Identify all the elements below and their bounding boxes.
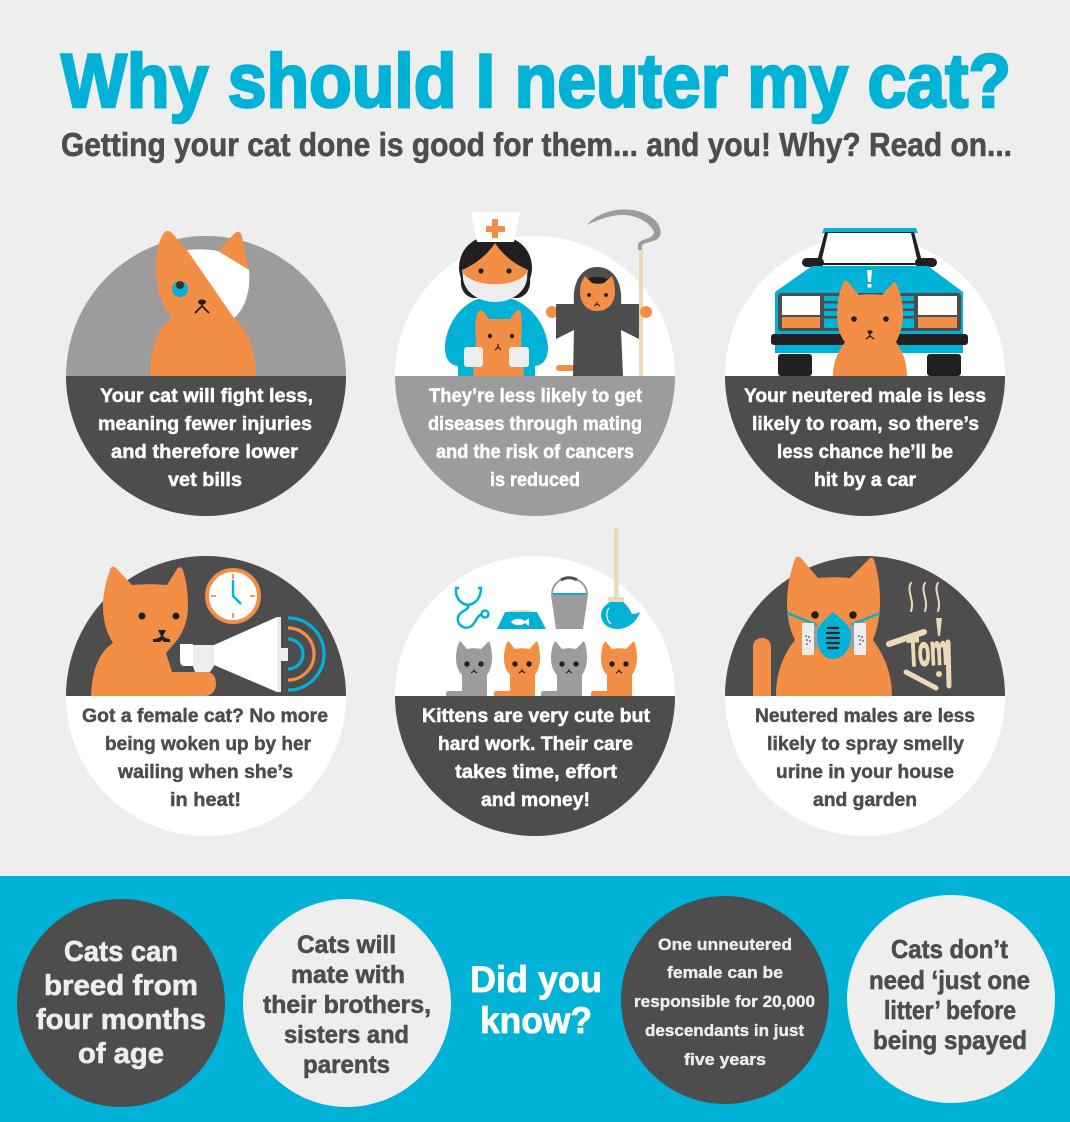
icon: kitten 4: [591, 642, 637, 696]
text: kittens: [422, 706, 651, 811]
icon: bucket: [551, 578, 588, 629]
icon: cat in gas mask: [753, 557, 892, 696]
fact: mate with family: mate with: [291, 961, 405, 989]
text: fight less: [98, 386, 313, 491]
icon: car and cat: [771, 228, 968, 376]
text: roaming: [744, 386, 986, 491]
heading: did you know: [470, 959, 602, 1041]
icon: grim reaper cat with scythe: [546, 210, 660, 376]
panel: no wailing: [66, 556, 346, 836]
fact: mate with family: [243, 899, 451, 1107]
fact: 20,000 descendants: responsible for 20,000: [634, 992, 815, 1011]
text: diseases: diseases through mating: [428, 414, 642, 435]
text: fight less: vet bills: [168, 470, 242, 491]
fact: four months: of age: [78, 1038, 164, 1070]
icon: kitten 1: [446, 642, 492, 696]
icon: kitten 3: [541, 642, 587, 696]
text: spraying: and garden: [813, 790, 917, 811]
text: spraying: urine in your house: [776, 762, 954, 783]
fact: four months: breed from: [44, 970, 198, 1002]
text: wailing: being woken up by her: [105, 734, 312, 755]
fact: mate with family: Cats will: [297, 931, 396, 959]
text: diseases: [428, 386, 643, 491]
fact: 20,000 descendants: descendants in just: [645, 1021, 804, 1040]
icon: nurse holding cat: [445, 212, 548, 376]
fact: just one litter: being spayed: [873, 1025, 1027, 1055]
text: spraying: likely to spray smelly: [767, 734, 964, 755]
fact: 20,000 descendants: One unneutered: [658, 935, 792, 954]
fact: just one litter: need ‘just one: [869, 965, 1030, 995]
icon: clock: [207, 570, 259, 622]
text: kittens: and money!: [481, 790, 590, 811]
fact: just one litter: litter’ before: [884, 995, 1016, 1025]
text: fight less: and therefore lower: [111, 442, 299, 463]
fact: just one litter: Cats don’t: [891, 934, 1008, 964]
fact: four months: four months: [36, 1004, 206, 1036]
text: fight less: meaning fewer injuries: [98, 414, 312, 435]
text: roaming: likely to roam, so there’s: [752, 414, 979, 435]
icon: kitten 2: [494, 642, 540, 696]
fact: mate with family: their brothers,: [263, 991, 431, 1019]
icon: food bowl: [497, 610, 546, 629]
heading: did you know: Did you: [470, 959, 602, 1000]
panel: kittens: [395, 528, 675, 836]
text: roaming: less chance he’ll be: [777, 442, 953, 463]
panel: fewer diseases: [395, 210, 675, 516]
icon: injured cat with bandage: [150, 231, 256, 376]
icon: stethoscope: [456, 588, 488, 628]
panel: did you know band: [0, 876, 1070, 1122]
heading: did you know: know?: [480, 1000, 592, 1041]
panel: less roaming: [725, 228, 1005, 516]
panel: fewer fights: [66, 231, 346, 516]
text: wailing: in heat!: [170, 790, 241, 811]
text: spraying: [755, 706, 975, 811]
text: roaming: hit by a car: [814, 470, 917, 491]
title: Why should I neuter my cat?: [61, 39, 1011, 124]
fact: 20,000 descendants: [621, 896, 829, 1104]
text: diseases: and the risk of cancers: [436, 442, 634, 463]
text: kittens: Kittens are very cute but: [422, 706, 651, 727]
text: wailing: [82, 706, 328, 811]
text: kittens: hard work. Their care: [438, 734, 633, 755]
icon: smell lines and graffiti: [889, 583, 949, 688]
icon: smell lines and graffiti: Tom: [906, 627, 949, 675]
fact: four months: Cats can: [64, 936, 178, 968]
text: diseases: They’re less likely to get: [429, 386, 643, 407]
text: fight less: Your cat will fight less,: [100, 386, 313, 407]
fact: just one litter: [847, 895, 1055, 1103]
fact: mate with family: parents: [303, 1051, 390, 1079]
icon: mop: [601, 528, 640, 629]
fact: 20,000 descendants: female can be: [667, 963, 783, 982]
fact: four months: [17, 899, 225, 1107]
text: wailing: Got a female cat? No more: [82, 706, 328, 727]
text: roaming: Your neutered male is less: [744, 386, 986, 407]
fact: 20,000 descendants: five years: [684, 1050, 766, 1069]
text: kittens: takes time, effort: [455, 762, 618, 783]
icon: cat with megaphone: [91, 567, 324, 696]
panel: less spraying: [725, 556, 1005, 836]
text: spraying: Neutered males are less: [755, 706, 975, 727]
text: diseases: is reduced: [490, 470, 580, 491]
fact: mate with family: sisters and: [284, 1021, 409, 1049]
text: wailing: wailing when she’s: [117, 762, 293, 783]
